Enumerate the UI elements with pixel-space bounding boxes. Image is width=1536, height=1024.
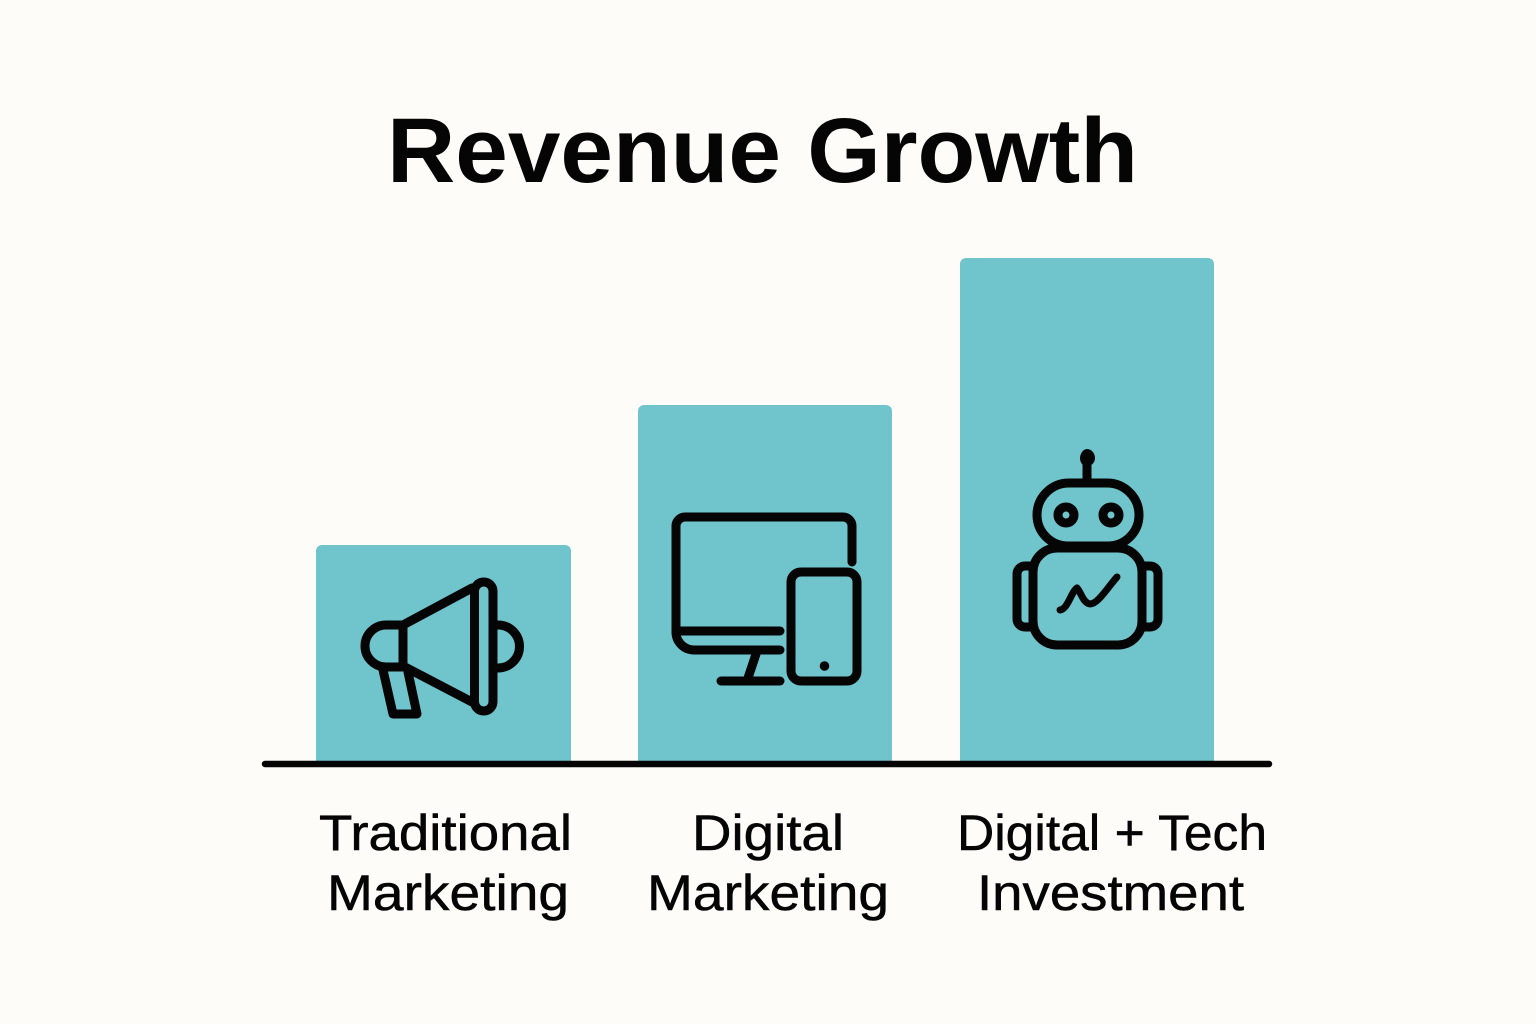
label: traditional marketing: Marketing: [327, 865, 569, 921]
label: digital marketing: Digital: [692, 805, 844, 861]
label: digital marketing: [647, 805, 889, 921]
icon: desktop monitor and phone: [676, 517, 857, 681]
title: Revenue Growth: [387, 100, 1138, 202]
icon: megaphone: [365, 582, 520, 714]
icon: robot with chart: [1017, 449, 1158, 645]
bar: traditional marketing: [316, 545, 571, 762]
label: digital + tech investment: [957, 805, 1267, 921]
bar: digital + tech investment: [960, 258, 1214, 762]
label: digital + tech investment: Digital + Tech: [957, 805, 1267, 861]
label: traditional marketing: [319, 805, 572, 921]
label: traditional marketing: Traditional: [319, 805, 572, 861]
chart baseline: [265, 761, 1269, 767]
bar: digital marketing: [638, 405, 892, 762]
label: digital marketing: Marketing: [647, 865, 889, 921]
label: digital + tech investment: Investment: [977, 865, 1244, 921]
